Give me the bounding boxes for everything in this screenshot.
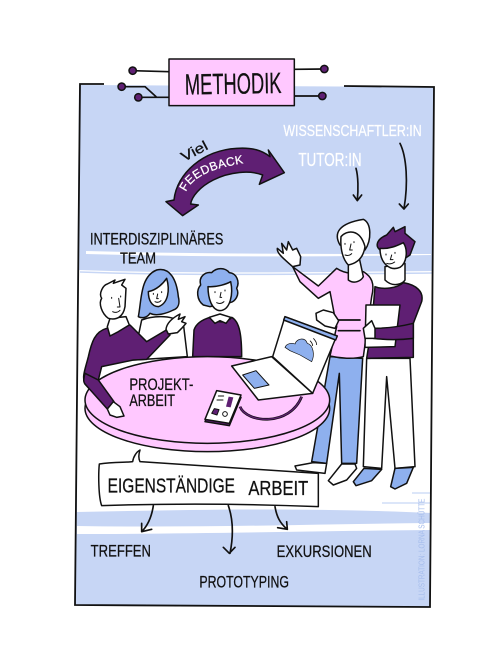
- prototype device: [205, 391, 241, 426]
- arrow: to exkursionen: [275, 507, 287, 529]
- speech box: [99, 450, 318, 507]
- speech box: EIGENSTÄNDIGE: [108, 475, 235, 498]
- label: projektarbeit: PROJEKT-: [129, 375, 193, 394]
- double-headed feedback arrow: [165, 137, 286, 216]
- main illustration layer: [84, 267, 422, 468]
- label: prototyping: PROTOTYPING: [199, 572, 289, 591]
- shoes: [295, 463, 413, 489]
- label: treffen: TREFFEN: [91, 542, 151, 561]
- icon: waving hand: [277, 242, 301, 267]
- person: man on the left: [84, 279, 186, 409]
- arrow: scientist: [399, 143, 408, 209]
- label: tutor:in: TUTOR:IN: [298, 149, 362, 170]
- label: exkursionen: EXKURSIONEN: [277, 542, 372, 561]
- label: team heading: INTERDISZIPLINÄRES: [90, 230, 223, 249]
- frame outline: [75, 84, 434, 607]
- label: wissenschaftler:in: WISSENSCHAFTLER:IN: [283, 123, 422, 140]
- person: tutor: [293, 267, 373, 463]
- background panel: [75, 85, 434, 607]
- label: team heading: TEAM: [120, 250, 156, 267]
- head: tutor: [337, 219, 370, 282]
- icon: man's hand on table: [107, 402, 124, 417]
- arrow: tutor: [353, 168, 362, 201]
- title box: [169, 59, 294, 106]
- label: viel: Viel: [178, 137, 210, 165]
- table: ARBEIT: [129, 391, 175, 410]
- speech box: ARBEIT: [248, 478, 308, 500]
- arrow: to treffen: [142, 506, 153, 532]
- arm of man over table: [84, 373, 114, 409]
- standing person heads: [277, 219, 415, 285]
- upper illustration layer: [90, 58, 422, 302]
- icon: book: [365, 305, 400, 347]
- cable: [240, 397, 302, 419]
- title connectors: [118, 65, 328, 101]
- illustration credit: ILLUSTRATION: LORNA SCHÜTTE: [417, 498, 427, 601]
- icon: hand: [316, 310, 339, 328]
- label: feedback: FEEDBACK: [179, 155, 244, 192]
- icon: cloud: [285, 339, 313, 362]
- laptop: [232, 317, 337, 400]
- label: team heading: [90, 230, 223, 267]
- lower illustration layer: [91, 450, 427, 601]
- person: scientist: [363, 283, 422, 468]
- title box: METHODIK: [185, 67, 282, 102]
- person: woman with blue hair: [133, 269, 187, 360]
- person: woman with curly hair: [193, 269, 242, 357]
- head: scientist: [377, 227, 415, 285]
- icon: raised hand: [166, 314, 186, 334]
- table: [85, 357, 330, 452]
- arrow: to prototyping: [223, 506, 235, 553]
